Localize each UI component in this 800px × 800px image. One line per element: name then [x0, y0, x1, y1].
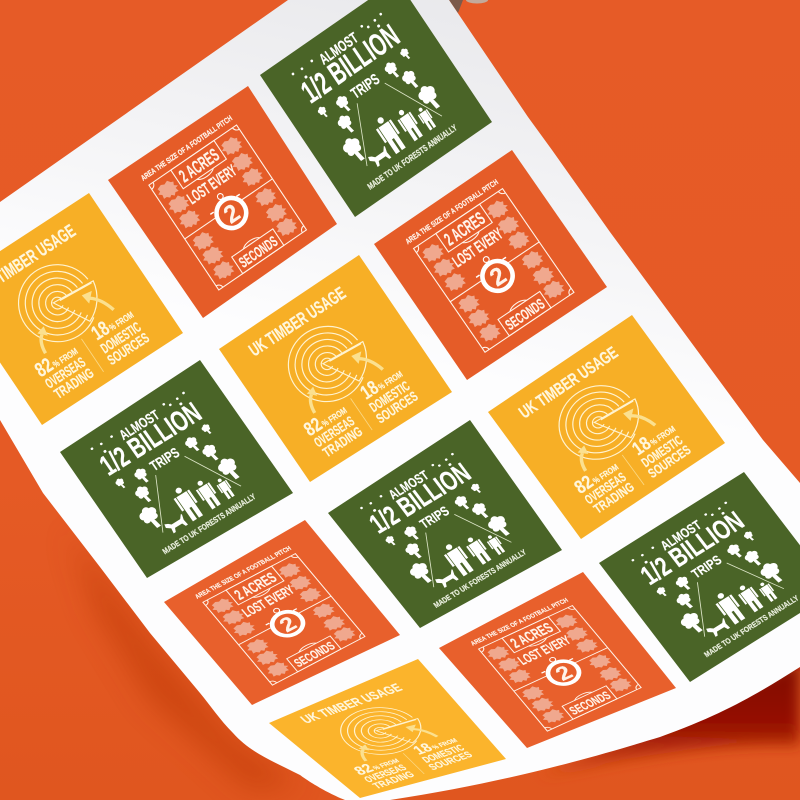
icon: dog — [434, 569, 459, 590]
icon: stopwatch — [535, 651, 587, 690]
text: 2: 2 — [485, 262, 512, 292]
stat: 82 percent: 82 — [350, 761, 377, 778]
stat: 82 percent: % FROM — [371, 757, 401, 771]
text: 2 acres: 2 ACRES — [440, 208, 489, 250]
text: 2 acres: 2 ACRES — [507, 620, 557, 651]
panel: orange pitch card right — [374, 150, 607, 380]
stat: 18 percent: % FROM — [376, 369, 404, 392]
caption: AREA THE SIZE OF A FOOTBALL PITCH — [404, 177, 500, 246]
panel: orange pitch card top — [108, 86, 337, 318]
heading: almost: ALMOST — [316, 29, 362, 69]
card background — [0, 193, 183, 425]
card background — [439, 572, 676, 748]
card background — [269, 659, 506, 798]
heading: trips: TRIPS — [689, 553, 725, 582]
paper shadow: lower left — [70, 530, 300, 790]
card background — [260, 0, 492, 217]
caption: AREA THE SIZE OF A FOOTBALL PITCH — [139, 114, 234, 183]
panel: orange pitch card lower left — [164, 520, 400, 705]
icon: stopwatch — [204, 184, 254, 236]
heading: almost: ALMOST — [117, 408, 163, 444]
heading: trips: TRIPS — [348, 71, 383, 103]
caption: AREA THE SIZE OF A FOOTBALL PITCH — [469, 596, 570, 647]
stat: 18 percent — [408, 732, 475, 772]
icon: trees — [114, 422, 244, 533]
text: 2: 2 — [219, 199, 245, 229]
football pitch lines — [149, 125, 306, 290]
stat: 82 percent: OVERSEAS — [361, 762, 409, 785]
card background — [60, 360, 293, 578]
stat: 18 percent: DOMESTIC — [98, 320, 144, 357]
stat: 18 percent: % FROM — [649, 424, 677, 447]
heading: trips: TRIPS — [148, 445, 183, 475]
icon: dog — [367, 146, 392, 169]
stat: 82 percent: TRADING — [52, 365, 97, 403]
heading: UK TIMBER USAGE — [245, 282, 349, 360]
stat: 18 percent: DOMESTIC — [419, 743, 467, 765]
card content — [298, 681, 475, 793]
text: seconds: SECONDS — [567, 689, 614, 717]
icon: family — [711, 569, 779, 626]
heading: half billion: 1/2 BILLION — [364, 457, 477, 540]
card content — [89, 389, 260, 557]
text: 2: 2 — [274, 612, 301, 636]
icon: dog — [164, 514, 189, 535]
stat: 18 percent: SOURCES — [426, 749, 475, 772]
stat: 82 percent: TRADING — [590, 479, 637, 516]
card content — [139, 114, 307, 291]
stat: 82 percent: % FROM — [320, 405, 349, 429]
pointer lines — [132, 441, 241, 534]
caption: AREA THE SIZE OF A FOOTBALL PITCH — [193, 544, 293, 600]
stat: 82 percent: TRADING — [370, 769, 417, 791]
stat: 82 percent: OVERSEAS — [582, 469, 629, 507]
icon: dog — [705, 618, 731, 639]
stat: 18 percent: SOURCES — [373, 388, 421, 426]
card background — [219, 255, 452, 482]
card content — [358, 450, 531, 610]
panel: green trips card top — [260, 0, 492, 217]
pointer lines — [403, 499, 511, 588]
card background — [328, 420, 562, 628]
icon: stars — [90, 391, 190, 458]
stat: 82 percent: OVERSEAS — [311, 413, 357, 450]
chart: tree rings — [274, 310, 384, 416]
icon: family — [169, 464, 236, 523]
card content — [290, 9, 461, 193]
card content — [0, 219, 153, 405]
divider — [622, 455, 644, 485]
panel: green trips card centre — [328, 420, 562, 628]
icon: stars — [631, 501, 733, 569]
heading: trips: TRIPS — [417, 504, 453, 532]
text: seconds: SECONDS — [291, 639, 338, 670]
text: seconds: SECONDS — [502, 296, 548, 334]
caption: MADE TO UK FORESTS ANNUALLY — [160, 491, 258, 556]
pointer lines — [335, 66, 442, 167]
heading: almost: ALMOST — [386, 468, 432, 503]
text: lost every: LOST EVERY — [239, 583, 298, 620]
icon: trees — [316, 46, 444, 166]
icons: burned trees — [209, 560, 359, 681]
arrow: domestic — [82, 285, 114, 320]
stat: 18 percent: 18 — [357, 377, 383, 404]
panel: green trips card lower right — [599, 472, 800, 682]
stat: 82 percent: 82 — [300, 414, 326, 441]
stat: 18 percent: % FROM — [107, 310, 136, 333]
caption: MADE TO UK FORESTS ANNUALLY — [366, 122, 459, 192]
chart: tree rings — [544, 369, 656, 474]
divider — [351, 398, 372, 430]
arrow: domestic — [623, 403, 655, 436]
stat: 18 percent — [86, 302, 153, 369]
text: 2: 2 — [550, 661, 577, 685]
text: lost every: LOST EVERY — [449, 224, 506, 271]
icons: burned trees — [155, 133, 300, 284]
panel: green trips card left — [60, 360, 293, 578]
stat: 18 percent — [355, 362, 421, 426]
text: lost every: LOST EVERY — [184, 161, 240, 208]
icon: family — [371, 92, 438, 156]
card content — [193, 544, 365, 686]
stat: 82 percent: OVERSEAS — [43, 355, 89, 392]
arrow: overseas — [573, 445, 597, 471]
heading: almost: ALMOST — [658, 518, 705, 554]
arrow: overseas — [32, 326, 57, 353]
card content — [245, 281, 421, 463]
icon: stopwatch — [259, 601, 311, 642]
panel: yellow timber card bottom — [269, 659, 506, 798]
icon: stars — [291, 12, 388, 84]
text: seconds: SECONDS — [236, 233, 281, 272]
arrow: domestic — [405, 721, 437, 742]
heading: UK TIMBER USAGE — [515, 342, 622, 422]
curl holder at top — [449, 0, 488, 13]
divider — [403, 753, 424, 774]
chart: tree rings — [326, 698, 438, 763]
card content — [630, 499, 800, 660]
stat: 18 percent: DOMESTIC — [366, 378, 413, 415]
stat: 18 percent: 18 — [409, 741, 436, 757]
text: lost every: LOST EVERY — [515, 633, 574, 668]
panel: orange pitch card lower right — [439, 572, 676, 748]
card content — [404, 177, 574, 354]
icon: trees — [655, 530, 787, 637]
text: 2 acres: 2 ACRES — [231, 569, 280, 603]
panel: yellow timber card centre — [219, 255, 452, 482]
divider — [81, 339, 104, 372]
arrow: domestic — [351, 346, 383, 380]
caption: MADE TO UK FORESTS ANNUALLY — [431, 547, 528, 610]
stat: 18 percent: % FROM — [430, 737, 459, 751]
stat: 18 percent: SOURCES — [105, 330, 153, 369]
card background — [599, 472, 800, 682]
chart: tree rings — [3, 248, 114, 357]
paper shadow: under curl — [540, 660, 800, 775]
football pitch lines — [414, 189, 574, 352]
card background — [164, 520, 400, 705]
panel: yellow timber card right — [488, 315, 725, 539]
pointer lines — [674, 547, 784, 638]
panel: yellow timber card left — [0, 193, 183, 425]
stat: 82 percent: % FROM — [51, 346, 80, 370]
football pitch lines — [479, 606, 641, 731]
icon: stopwatch — [469, 247, 521, 298]
icons: burned trees — [419, 196, 568, 347]
stat: 82 percent — [571, 455, 637, 518]
heading: UK TIMBER USAGE — [298, 682, 406, 726]
card content — [515, 341, 694, 519]
stat: 18 percent: DOMESTIC — [638, 432, 685, 470]
stat: 82 percent — [300, 398, 365, 462]
icons: burned trees — [484, 612, 635, 727]
stat: 18 percent — [627, 417, 694, 481]
stat: 18 percent: 18 — [628, 433, 655, 460]
football pitch lines — [203, 554, 365, 685]
stat: 82 percent: % FROM — [591, 462, 620, 486]
icon: family — [440, 522, 507, 578]
heading: half billion: 1/2 BILLION — [94, 397, 208, 482]
stat: 82 percent — [31, 338, 97, 404]
stat: 82 percent: 82 — [31, 354, 57, 382]
icon: stars — [360, 452, 459, 517]
card background — [374, 150, 607, 380]
stat: 82 percent: 82 — [571, 472, 597, 498]
stat: 82 percent: TRADING — [320, 423, 365, 460]
text: 2 acres: 2 ACRES — [175, 144, 223, 186]
arrow: overseas — [353, 745, 378, 761]
stat: 82 percent — [350, 752, 417, 792]
stat: 18 percent: 18 — [88, 317, 114, 345]
card content — [469, 596, 641, 732]
arrow: overseas — [302, 387, 326, 413]
stat: 18 percent: SOURCES — [645, 442, 694, 481]
card background — [488, 315, 725, 539]
card background — [108, 86, 337, 318]
icon: trees — [384, 482, 514, 587]
